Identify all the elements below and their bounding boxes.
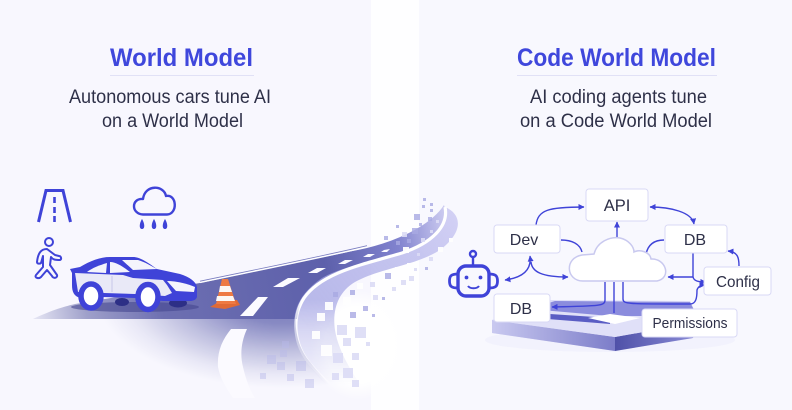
car lower body panel xyxy=(75,273,172,296)
box: Dev: Dev xyxy=(510,232,538,249)
box: Config: Config xyxy=(716,274,760,291)
panel: code world model background xyxy=(419,0,792,410)
cloud xyxy=(569,238,666,281)
centre gap xyxy=(371,0,419,410)
diagram platform xyxy=(485,300,735,352)
box: DB top: DB xyxy=(684,232,706,249)
road lower fading surface xyxy=(118,319,322,380)
car windows xyxy=(87,263,107,273)
text: world model description: on a World Model xyxy=(102,111,243,132)
text: code world model description: AI coding agents tune xyxy=(530,87,707,108)
white glow behind dissolve xyxy=(310,290,406,400)
box: DB top xyxy=(665,225,727,253)
text: code world model description xyxy=(520,87,712,132)
icon: car xyxy=(70,257,199,312)
car body silhouette xyxy=(70,257,197,301)
lane dashes xyxy=(240,249,390,316)
icon: pedestrian xyxy=(36,238,61,278)
heading: World Model: World Model xyxy=(110,44,253,72)
road pixel band xyxy=(294,207,458,372)
heading: Code World Model: Code World Model xyxy=(517,44,716,72)
icon: rain cloud xyxy=(134,188,175,229)
text: world model description xyxy=(69,87,271,132)
icon: traffic cone xyxy=(210,279,240,309)
panel: world model background xyxy=(0,0,371,410)
car headlight xyxy=(167,281,195,292)
road foreground dash xyxy=(218,329,255,398)
box: DB lower: DB xyxy=(510,301,532,318)
box: Dev xyxy=(494,225,560,253)
road xyxy=(34,205,458,380)
road upper surface xyxy=(33,205,445,319)
road pixel dissolve squares xyxy=(260,198,453,388)
box: Config xyxy=(704,267,771,295)
connector arrows xyxy=(505,207,739,313)
icon: road sign xyxy=(38,190,70,222)
box: DB lower xyxy=(494,294,550,322)
icon: robot xyxy=(450,251,498,296)
box: Permissions xyxy=(642,309,737,337)
text: world model description: Autonomous cars tune AI xyxy=(69,87,271,108)
box: Permissions: Permissions xyxy=(652,316,728,332)
text: code world model description: on a Code World Model xyxy=(520,111,712,132)
box: API xyxy=(586,189,648,221)
road top edge lines xyxy=(200,247,367,282)
box: API: API xyxy=(604,197,630,215)
